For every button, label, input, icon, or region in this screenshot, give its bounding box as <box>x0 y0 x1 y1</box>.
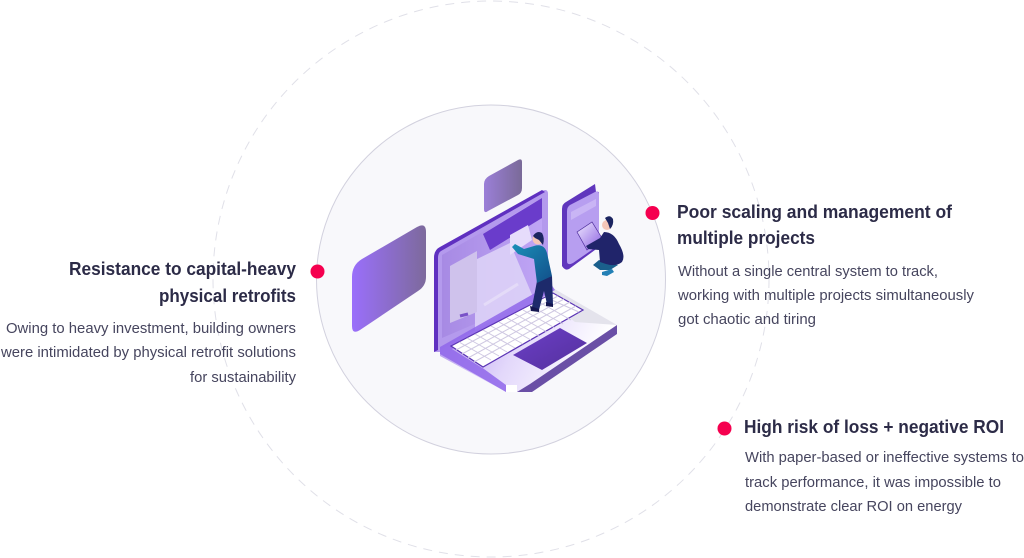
laptop lid <box>434 190 548 352</box>
dashed outer circle <box>213 1 769 557</box>
inner circle <box>316 105 666 454</box>
person at the laptop <box>510 225 553 312</box>
illustration: laptop with two people <box>352 159 623 392</box>
heading: multiple projects <box>677 228 815 248</box>
tablet <box>562 184 599 270</box>
keyboard <box>451 293 583 367</box>
heading: High risk of loss + negative ROI <box>744 417 1004 437</box>
floating panel left <box>352 225 426 332</box>
person with the sheet at the tablet <box>577 216 623 276</box>
heading: physical retrofits <box>159 286 296 306</box>
trackpad <box>513 328 587 370</box>
marker <box>646 206 660 220</box>
body text: With paper-based or ineffective systems to <box>745 450 1024 466</box>
body text: demonstrate clear ROI on energy <box>745 499 963 515</box>
body text: working with multiple projects simultaneously <box>677 288 975 304</box>
heading: Poor scaling and management of <box>677 202 953 222</box>
body text: got chaotic and tiring <box>678 312 816 328</box>
point: physical retrofits <box>0 259 324 386</box>
laptop base <box>440 284 617 392</box>
body text: were intimidated by physical retrofit solutions <box>0 345 296 361</box>
body text: Owing to heavy investment, building owners <box>6 321 296 337</box>
body text: for sustainability <box>190 370 297 386</box>
body text: track performance, it was impossible to <box>745 475 1001 491</box>
marker <box>718 422 732 436</box>
marker <box>310 264 324 278</box>
heading: Resistance to capital-heavy <box>69 259 296 279</box>
body text: Without a single central system to track, <box>678 264 938 280</box>
point: multiple projects <box>646 202 975 328</box>
floating panel top <box>484 159 522 212</box>
point: negative ROI <box>718 417 1024 515</box>
